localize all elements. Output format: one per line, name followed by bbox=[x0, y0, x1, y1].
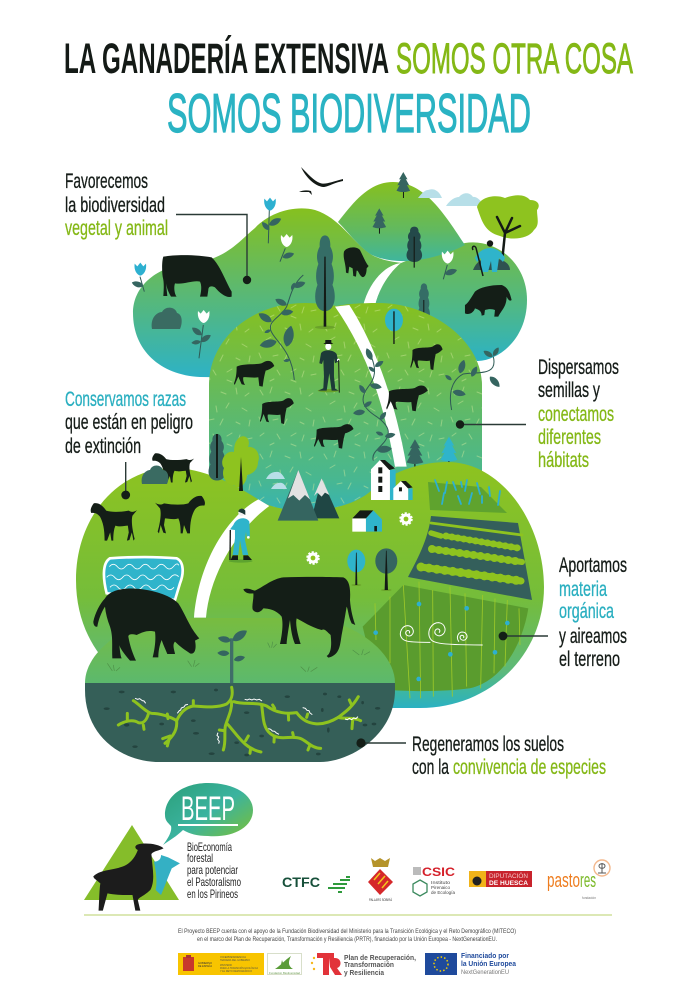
BEEP logo bbox=[84, 783, 253, 911]
logo: Gobierno de España: Y EL RETO DEMOGRÁFICO bbox=[220, 969, 253, 973]
BEEP logo: el Pastoralismo bbox=[187, 875, 241, 889]
callout: breeds bbox=[121, 462, 130, 499]
text: soils: con la bbox=[412, 756, 449, 779]
shepherd in blue on road bbox=[229, 509, 253, 563]
text: biodiversity: Favorecemos bbox=[65, 170, 148, 193]
houses bbox=[352, 460, 413, 532]
text: seeds: Dispersamos bbox=[538, 356, 619, 379]
logo: Gobierno de España: VICEPRESIDENCIA bbox=[220, 955, 246, 959]
root system bbox=[118, 687, 361, 753]
text: seeds bbox=[538, 356, 619, 472]
logo: CSIC: de Ecología bbox=[431, 890, 455, 895]
logo: Fundación Biodiversidad bbox=[268, 954, 302, 975]
BEEP logo: para potenciar bbox=[187, 863, 238, 877]
shepherd in blue on rock bbox=[472, 240, 510, 276]
logo: Diputación de Huesca bbox=[469, 871, 532, 887]
road: central bbox=[335, 305, 407, 467]
road: lower bbox=[194, 499, 269, 618]
text: biodiversity: la biodiversidad bbox=[65, 194, 165, 217]
shepherd in black bbox=[318, 340, 340, 393]
logo: CSIC: Pirenaico bbox=[431, 885, 450, 890]
callout: soils bbox=[356, 738, 406, 748]
logo: pastores: fundación bbox=[582, 895, 596, 900]
seedling and roots bbox=[118, 628, 361, 753]
logo: CSIC bbox=[413, 865, 455, 896]
clouds bbox=[418, 189, 486, 206]
logo: Gobierno de España: MINISTERIO bbox=[220, 963, 233, 967]
funding note: El Proyecto BEEP cuenta con el apoyo de la Fundación Biodiversidad del Ministerio para la Transición Ecológica y el Reto Demográfico (MITECO) bbox=[178, 929, 516, 935]
tree on hilltop: light green with bare branches bbox=[477, 195, 539, 262]
text: seeds: semillas y bbox=[538, 379, 600, 402]
text: seeds: conectamos bbox=[538, 403, 614, 426]
text: organic matter: orgánica bbox=[559, 600, 614, 623]
grass tufts bbox=[107, 642, 370, 672]
logo: Plan de Recuperación: y Resiliencia bbox=[344, 970, 384, 977]
mountains bbox=[278, 470, 339, 521]
BEEP logo: BioEconomía bbox=[187, 840, 232, 854]
cow: right hill bbox=[465, 285, 512, 317]
logo: Gobierno de España: DE ESPAÑA bbox=[198, 963, 212, 968]
tulips bbox=[131, 198, 458, 358]
logo: Plan de Recuperación: Plan de Recuperación, bbox=[344, 955, 416, 962]
bush bbox=[152, 308, 182, 329]
logo: CTFC bbox=[282, 874, 350, 892]
text: seeds: hábitats bbox=[538, 449, 589, 472]
logo: coat of arms bbox=[368, 858, 393, 902]
logo: European Union bbox=[425, 953, 516, 976]
logo: CTFC: CTFC bbox=[282, 874, 320, 890]
back hill trees bbox=[373, 172, 430, 328]
funding note bbox=[178, 929, 516, 943]
text: soils: convivencia de especies bbox=[453, 756, 606, 779]
goats bbox=[91, 453, 205, 541]
illustration: back hills bbox=[133, 182, 527, 380]
logo: Plan de Recuperación bbox=[311, 953, 416, 977]
logo: European Union: la Unión Europea bbox=[461, 961, 516, 968]
icon: birds bbox=[299, 167, 343, 195]
valley clouds bbox=[266, 472, 287, 489]
text: organic matter: el terreno bbox=[559, 648, 620, 671]
bush near goat bbox=[142, 466, 168, 484]
vines bbox=[257, 275, 502, 461]
logo: pastores: pasto bbox=[547, 870, 580, 892]
logo: Gobierno de España: TERCERA DEL GOBIERNO bbox=[220, 958, 251, 962]
logo: Gobierno de España: GOBIERNO bbox=[198, 961, 213, 965]
title: LA GANADERÍA EXTENSIVA bbox=[64, 35, 389, 83]
tree pair at left of valley bbox=[209, 434, 259, 491]
logo: pastores bbox=[547, 860, 610, 900]
logo: CSIC: CSIC bbox=[422, 865, 455, 879]
meadow trees bbox=[315, 235, 457, 475]
text: seeds: diferentes bbox=[538, 426, 601, 449]
callout: biodiversity bbox=[176, 214, 251, 284]
pasture field with spirals bbox=[363, 582, 528, 698]
cow: front left grazing bbox=[93, 589, 199, 661]
cow: upper left bbox=[162, 255, 232, 297]
logo: Diputación de Huesca: DIPUTACIÓN bbox=[489, 873, 528, 880]
lower green land bbox=[76, 462, 544, 708]
text: soils bbox=[412, 733, 606, 779]
flowers: white daisies bbox=[308, 514, 412, 564]
soil cross-section hill bbox=[85, 618, 395, 762]
sheep flock bbox=[234, 344, 443, 449]
soil stones and worms bbox=[104, 689, 380, 756]
text: breeds: de extinción bbox=[65, 435, 141, 458]
logo: Plan de Recuperación: Transformación bbox=[344, 962, 394, 969]
callout: organic matter bbox=[499, 632, 548, 640]
logo: Diputación de Huesca: DE HUESCA bbox=[489, 880, 528, 887]
cow: front right standing bbox=[243, 577, 355, 658]
upper field with blue plants bbox=[428, 480, 507, 513]
logo: coat of arms: PALLARS SOBIRÀ bbox=[369, 898, 393, 902]
funding note: en el marco del Plan de Recuperación, Transformación y Resiliencia (PRTR), financiado por la Unión Europea - NextGenerationEU. bbox=[197, 937, 497, 943]
pond bbox=[104, 557, 183, 600]
central meadow bbox=[209, 303, 482, 530]
text: breeds bbox=[65, 388, 193, 458]
cow: small on back hill bbox=[344, 247, 369, 277]
BEEP logo: BEEP bbox=[181, 790, 235, 828]
logo: CSIC: Instituto bbox=[431, 880, 451, 885]
logo: Gobierno de España: PARA LA TRANSICIÓN ECOLÓGICA bbox=[220, 965, 258, 970]
logo: Fundación Biodiversidad: Fundación Biodiversidad bbox=[269, 971, 300, 975]
text: organic matter: materia bbox=[559, 578, 607, 601]
BEEP logo: en los Pirineos bbox=[187, 887, 238, 901]
logo: Gobierno de España bbox=[178, 953, 264, 975]
title bbox=[64, 35, 633, 144]
callout: seeds bbox=[456, 420, 526, 429]
divider bbox=[84, 914, 612, 916]
logo: European Union: NextGenerationEU bbox=[461, 969, 509, 976]
text: biodiversity bbox=[65, 170, 168, 240]
text: organic matter: Aportamos bbox=[559, 554, 627, 577]
trees: valley pair bbox=[347, 548, 397, 591]
text: breeds: que están en peligro bbox=[65, 411, 193, 434]
text: organic matter bbox=[559, 554, 627, 671]
BEEP logo: forestal bbox=[187, 851, 213, 865]
crop rows field bbox=[408, 516, 532, 600]
logo: pastores: res bbox=[580, 870, 596, 892]
logo: European Union: Financiado por bbox=[461, 953, 509, 960]
text: breeds: Conservamos razas bbox=[65, 388, 186, 411]
text: biodiversity: vegetal y animal bbox=[65, 217, 168, 240]
text: soils: Regeneramos los suelos bbox=[412, 733, 564, 756]
text: organic matter: y aireamos bbox=[559, 625, 627, 648]
